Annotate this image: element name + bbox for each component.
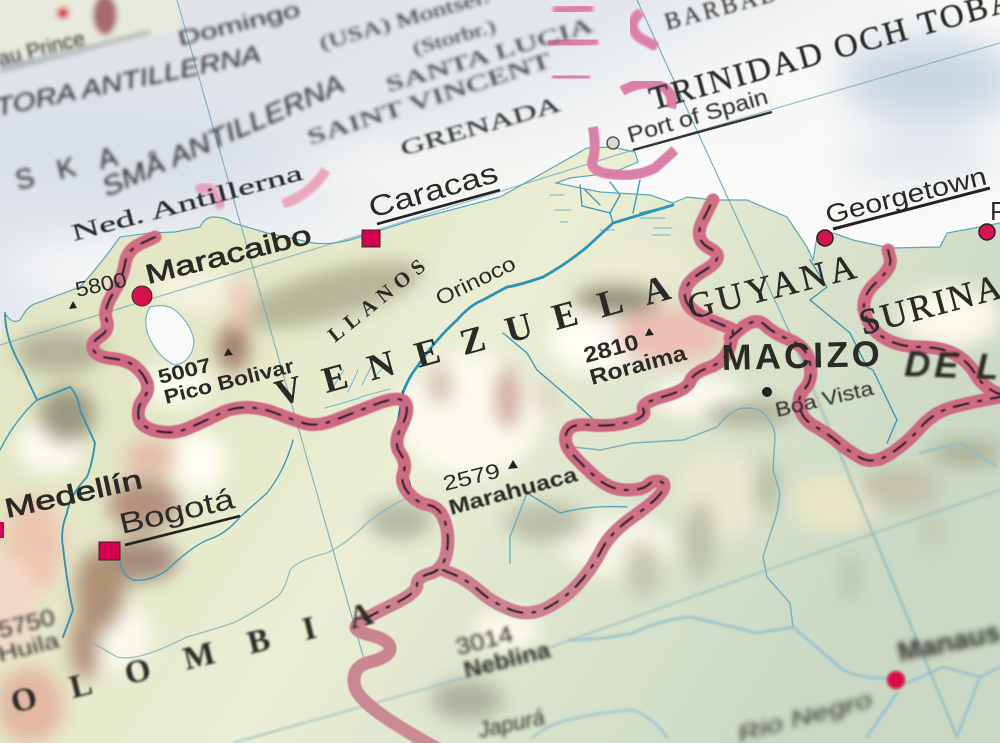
city: Manaus [887,616,1000,689]
city: Maracaibo [132,220,314,306]
city: Medellin: Medellín [2,464,145,524]
peak: Roraima [581,328,690,390]
peak: Neblina: Neblina [461,636,553,683]
peak: Pico Bolivar: Pico Bolivar [162,355,296,409]
label: Port of Spain [607,84,772,150]
relief shading: mountains [0,247,1000,743]
label: Orinoco: Orinoco [432,252,519,310]
national borders [93,200,1000,743]
sea labels: out of focus: Domingo [176,0,302,51]
peak: Neblina: 3014 [453,621,516,660]
city: Medellin [0,464,145,538]
sea labels: out of focus: (Storbr.) [411,16,498,60]
label: Colombia: OLOMBIA [7,596,377,721]
city: Paramaribo [979,196,1000,240]
city: Bogota [99,483,240,560]
sea labels: out of focus [0,0,597,202]
sea labels: out of focus: SKA [12,135,144,196]
city: Bogota: Bogotá [116,483,239,541]
label: Llanos: LLANOS [323,254,430,347]
coastline [5,147,1000,321]
peak: 5800: 5800 [73,269,129,302]
peak: Pico Bolivar: 5007 [156,354,214,389]
border band [93,200,1000,743]
peak: Marahuaca: Marahuaca [446,463,580,520]
sea labels: out of focus: SAINT VINCENT [304,47,555,150]
peak: Neblina [453,621,553,683]
label: Japura: Japurá [475,704,547,743]
label: Venezuela: VENEZUELA [271,267,675,415]
peak: Marahuaca: 2579 [441,460,502,496]
island territory outlines [197,7,675,208]
lake: Maracaibo [146,306,194,365]
rivers [0,180,1000,737]
city: Georgetown: Georgetown [822,161,990,230]
island: Hispaniola out of focus [0,0,180,70]
peak: Roraima: 2810 [581,329,641,368]
sea labels: out of focus: SANTA LUCIA [383,12,597,97]
peak: Pico Bolivar [156,348,296,409]
city: Georgetown [817,161,990,246]
city: Manaus: Manaus [895,616,1000,668]
peak: Marahuaca [441,460,580,520]
label: Macizo: MACIZO [721,333,880,378]
city: Boa Vista: Boa Vista [773,378,877,422]
label: Port of Spain: Port of Spain [624,84,771,148]
peak: 5800 [69,269,129,309]
label: Ned. Antillerna: Ned. Antillerna [69,160,305,246]
peak: Roraima: Roraima [587,340,690,390]
peak: Huila [0,604,62,667]
city: Maracaibo: Maracaibo [142,220,314,290]
label: Guyana: GUYANA [683,246,860,327]
label: Grenada: GRENADA [397,91,563,161]
border dash [93,200,1000,624]
city: Caracas: Caracas [365,157,502,225]
sea labels: out of focus: SMÅ ANTILLERNA [97,68,349,202]
city: Caracas [362,157,502,247]
